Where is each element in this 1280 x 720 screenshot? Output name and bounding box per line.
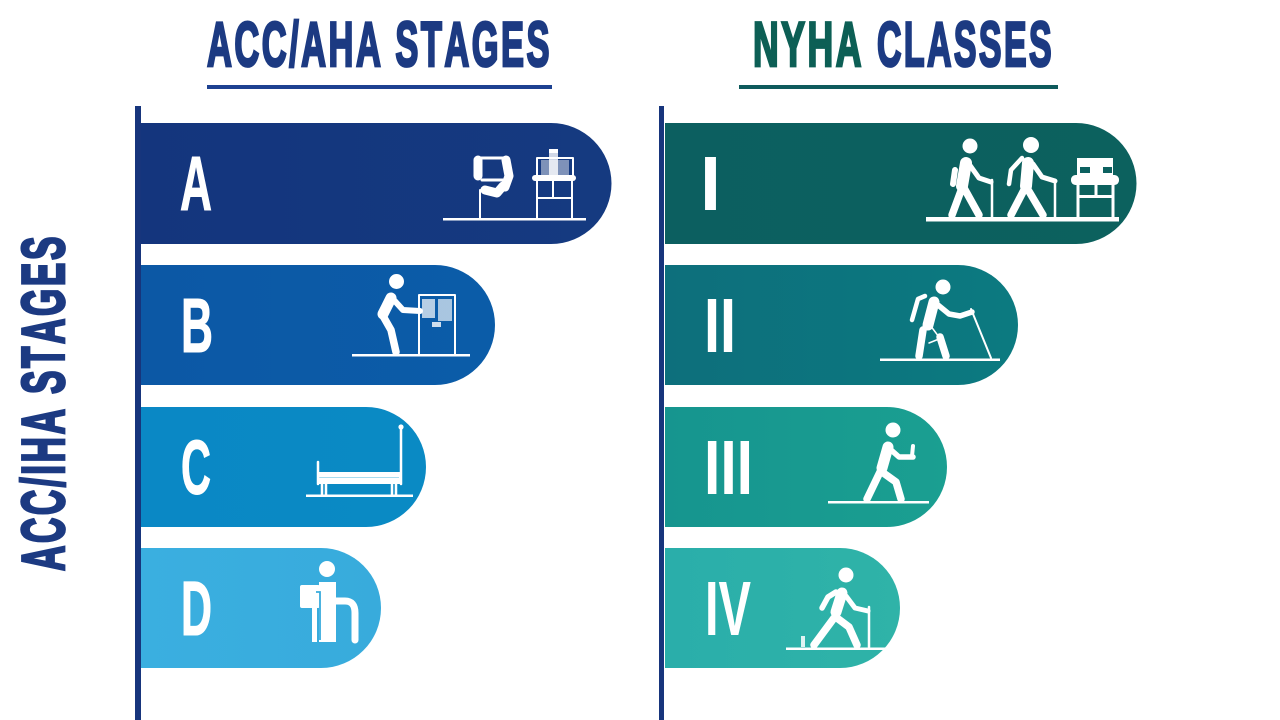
panel: class II: II xyxy=(704,283,736,369)
panel: stage D: D xyxy=(181,566,212,652)
panel: class IV: IV xyxy=(705,566,751,652)
panel: stage A xyxy=(141,123,612,244)
panel: class I xyxy=(665,123,1136,244)
heading: ACC/AHA Stages xyxy=(207,10,552,89)
panel: class III: III xyxy=(704,425,753,511)
panel: stage C xyxy=(141,407,426,527)
heading: NYHA Classes xyxy=(739,10,1058,89)
icon: two walkers with canes and a chair xyxy=(926,137,1119,222)
icon: hospital bed xyxy=(306,424,413,497)
panel: stage B xyxy=(141,265,495,385)
heading: ACC/AHA Stages: ACC/AHA STAGES xyxy=(207,10,552,80)
icon: hiker with pole xyxy=(880,280,1000,361)
icon: medical machines on stands xyxy=(443,149,586,220)
right axis line xyxy=(659,106,664,720)
icon: person at a monitor xyxy=(352,274,470,356)
heading: NYHA Classes: CLASSES xyxy=(877,10,1054,80)
panel: class II xyxy=(665,265,1018,385)
icon: walking person xyxy=(828,422,929,504)
icon: person with a walker xyxy=(300,561,355,642)
icon: person walking with cane xyxy=(786,568,886,650)
vertical axis label: ACC/IHA Stages: ACC/IHA STAGES xyxy=(10,234,77,571)
panel: stage D xyxy=(141,548,381,668)
panel: stage C: C xyxy=(181,425,211,511)
panel: stage A: A xyxy=(180,141,212,227)
panel: class III xyxy=(665,407,947,527)
panel: class IV xyxy=(665,548,900,668)
heading: NYHA Classes: NYHA xyxy=(753,10,864,80)
panel: class I: I xyxy=(700,141,721,227)
panel: stage B: B xyxy=(181,283,213,369)
left axis line xyxy=(135,106,141,720)
